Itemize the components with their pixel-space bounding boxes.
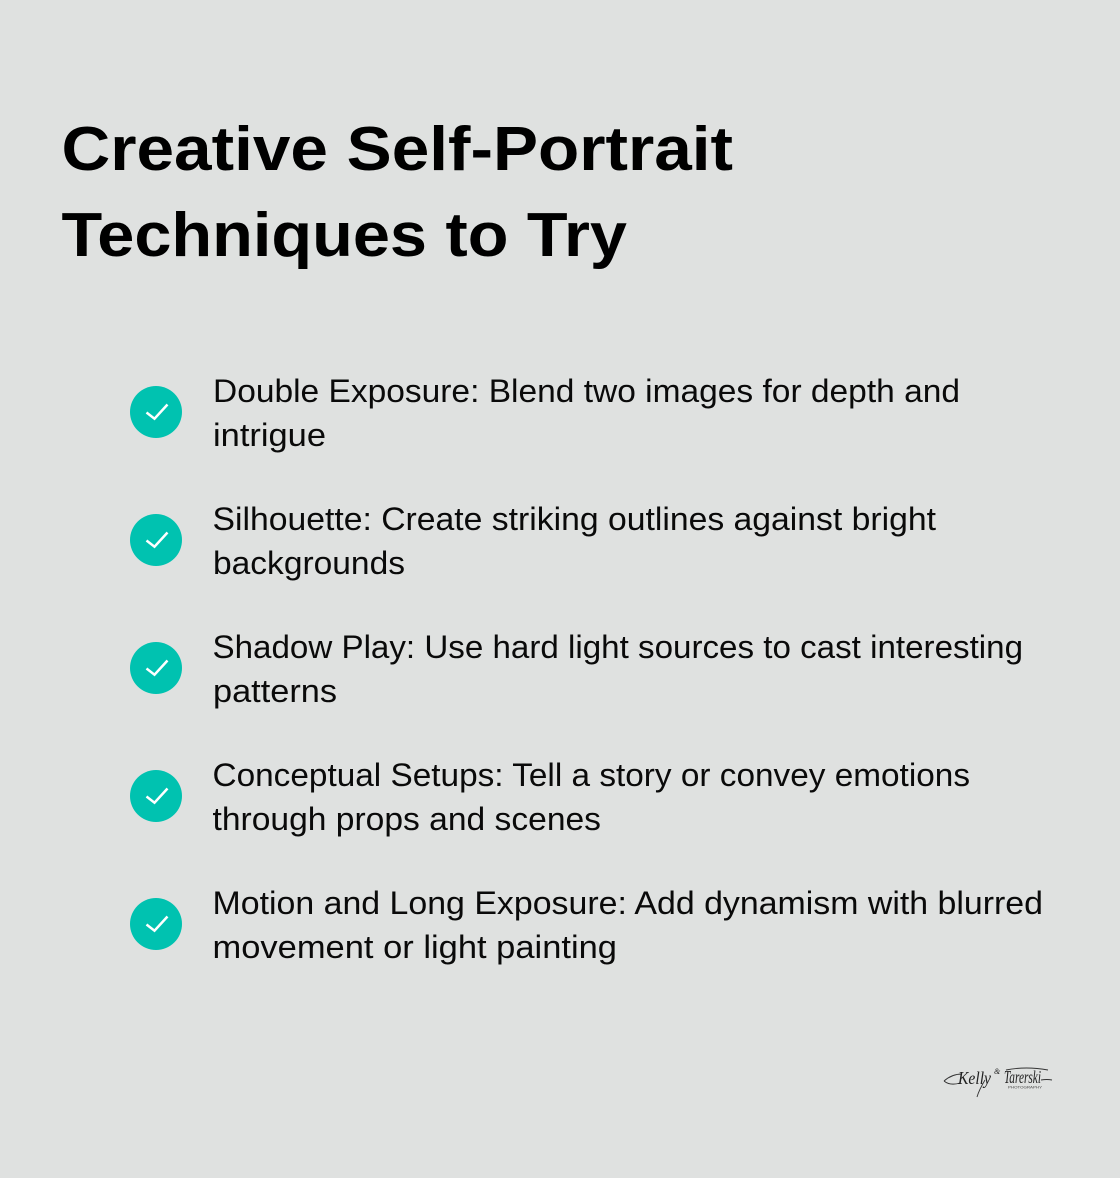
text: double exposure: Double Exposure: Blend two images for depth and — [213, 373, 960, 409]
item: shadow play — [130, 629, 1023, 709]
icon: check — [130, 386, 182, 438]
logo: signature: PHOTOGRAPHY — [1008, 1086, 1043, 1090]
icon: check — [130, 770, 182, 822]
text: conceptual setups: through props and scenes — [212, 801, 601, 837]
checklist — [130, 373, 1043, 965]
icon: check — [130, 642, 182, 694]
text: conceptual setups: Conceptual Setups: Tell a story or convey emotions — [212, 757, 970, 793]
text: double exposure: intrigue — [213, 417, 326, 453]
item: silhouette — [130, 501, 936, 581]
logo: signature — [944, 1067, 1052, 1097]
text: silhouette: Silhouette: Create striking outlines against bright — [212, 501, 936, 537]
text: double exposure — [213, 373, 960, 453]
logo: signature: Tarerski — [1004, 1067, 1041, 1087]
text: motion and long exposure: movement or light painting — [212, 929, 617, 965]
title — [62, 115, 733, 270]
logo: signature: & — [994, 1067, 1001, 1076]
title: Techniques to Try — [62, 201, 628, 270]
icon: check — [130, 898, 182, 950]
text: motion and long exposure: Motion and Long Exposure: Add dynamism with blurred — [212, 885, 1043, 921]
text: silhouette — [212, 501, 936, 581]
icon: check — [130, 514, 182, 566]
text: shadow play: patterns — [213, 673, 337, 709]
text: silhouette: backgrounds — [213, 545, 405, 581]
text: shadow play: Shadow Play: Use hard light sources to cast interesting — [212, 629, 1023, 665]
logo: signature: Kelly — [957, 1068, 991, 1088]
title: Creative Self-Portrait — [62, 115, 733, 184]
item: motion and long exposure — [130, 885, 1043, 965]
item: double exposure — [130, 373, 960, 453]
text: motion and long exposure — [212, 885, 1043, 965]
text: shadow play — [212, 629, 1023, 709]
item: conceptual setups — [130, 757, 970, 837]
text: conceptual setups — [212, 757, 970, 837]
